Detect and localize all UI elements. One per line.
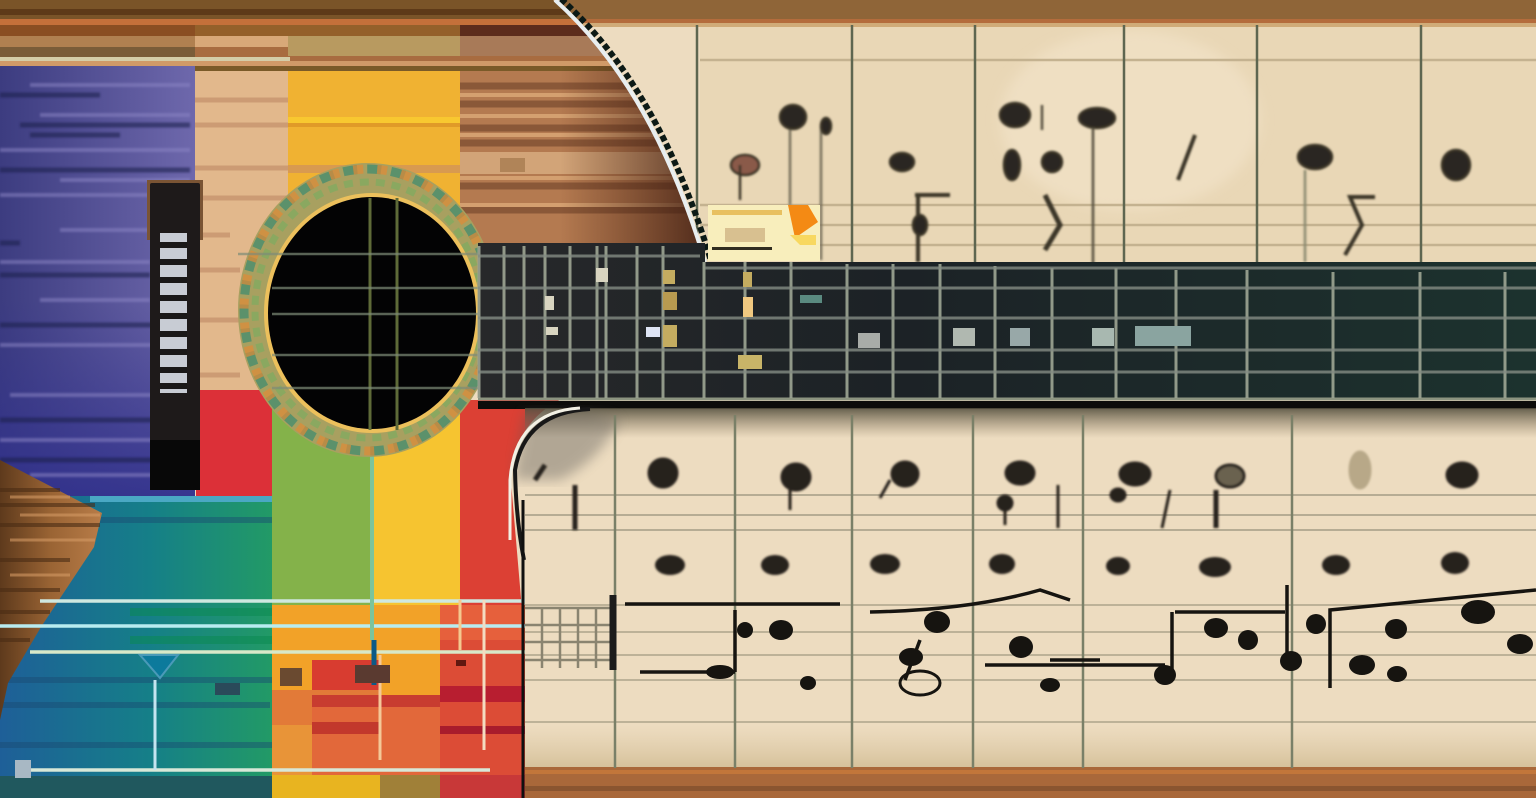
lower strings [0,440,525,770]
fret inlays [545,268,1191,369]
panel: lower body curve [510,408,590,798]
panel: wood lower bout [0,460,102,720]
panel: top wood band [560,0,1536,27]
flame accent [708,205,820,261]
sheet music: lower second row notes [655,552,1469,577]
sheet music: upper notes [731,103,1470,265]
sheet music: clef block [525,595,613,670]
icon: guitar bridge [147,180,203,490]
fretboard cast shadow [525,408,1536,438]
panel: bottom wood band [525,767,1536,798]
strings [478,256,1536,372]
purple stripe [0,66,195,500]
panel: upper body with colour stripes [0,0,720,500]
lower body colour stripes [0,390,560,798]
tan stripe [195,71,288,396]
lower body corner shadow [515,412,620,480]
yellow stripe [288,71,460,211]
sheet music: lower first row notes [535,452,1477,530]
fret lines [479,246,1505,398]
sheet music: beamed notes [625,585,1536,695]
wood stripes [460,71,648,243]
sheet music: lower bar lines and staff [525,415,1536,768]
small marks on body [15,660,466,778]
sheet music: upper bar lines and staff [697,25,1536,275]
panel: fretboard [478,243,1536,405]
body edge binding [555,0,711,262]
top bands [0,0,572,19]
icon: soundhole and rosette [238,163,498,457]
